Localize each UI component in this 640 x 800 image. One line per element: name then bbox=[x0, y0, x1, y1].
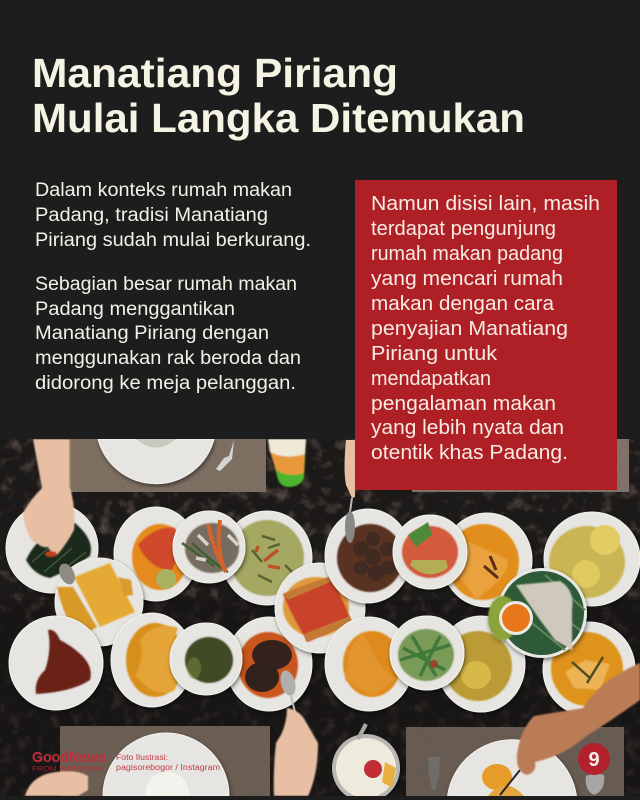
page number badge bbox=[578, 743, 610, 775]
photo credit: pagisorebogor / Instagram bbox=[116, 763, 220, 772]
plate: yellow eggs bbox=[544, 512, 640, 606]
granite table bbox=[0, 439, 640, 796]
hand bottom centre bbox=[274, 708, 318, 796]
drinking glass bbox=[268, 439, 306, 487]
panel: red callout bbox=[355, 180, 617, 490]
text block: first paragraph: Dalam konteks rumah makan bbox=[35, 180, 292, 201]
logo: GoodNews from Indonesia bbox=[32, 749, 106, 773]
plate: bottom left rice bbox=[103, 733, 229, 796]
text block: second paragraph: menggunakan rak beroda dan bbox=[35, 348, 301, 369]
plate: bottom yellow curry bbox=[437, 616, 525, 712]
callout text: yang mencari rumah bbox=[371, 267, 563, 290]
plate: corn fritter bbox=[55, 558, 143, 646]
callout text: penyajian Manatiang bbox=[371, 317, 568, 340]
text block: second paragraph: Manatiang Piriang dengan bbox=[35, 323, 269, 344]
plate: orange curry fish bbox=[442, 513, 532, 607]
plate: chicken bbox=[9, 616, 103, 710]
callout text: yang lebih nyata dan bbox=[371, 416, 564, 439]
bowl: cassava leaves bbox=[170, 623, 242, 695]
hand behind red box bbox=[344, 440, 355, 498]
logo: GoodNews from Indonesia: FROM INDONESIA bbox=[32, 764, 105, 773]
bowl: sambal vegetables bbox=[393, 515, 467, 589]
bowl: dessert bbox=[332, 724, 400, 796]
placemat top left bbox=[70, 439, 266, 492]
plate: dark meat bbox=[226, 617, 312, 711]
plate: bottom right orange curry bbox=[543, 622, 635, 716]
arm and hand bottom right bbox=[517, 663, 640, 775]
top rice plate bbox=[98, 439, 214, 484]
callout text: mendapatkan bbox=[371, 367, 491, 390]
text block: first paragraph bbox=[35, 180, 311, 251]
text block: second paragraph: Sebagian besar rumah makan bbox=[35, 274, 297, 295]
placemat bottom left bbox=[60, 726, 270, 796]
callout text: Piriang untuk bbox=[371, 342, 498, 365]
plate: red balado centre bbox=[275, 563, 365, 653]
callout text: otentik khas Padang. bbox=[371, 441, 568, 464]
fork top bbox=[216, 440, 234, 471]
callout text bbox=[371, 192, 600, 464]
callout text: pengalaman makan bbox=[371, 392, 556, 415]
callout text: Namun disisi lain, masih bbox=[371, 192, 600, 215]
text block: second paragraph bbox=[35, 274, 301, 394]
photo credit: Foto Ilustrasi: bbox=[116, 753, 168, 762]
logo: GoodNews from Indonesia: GoodNews bbox=[32, 749, 106, 766]
bowl: green beans salad bbox=[390, 616, 464, 690]
bowl: anchovy and beans bbox=[173, 511, 245, 583]
text block: first paragraph: Piriang sudah mulai berkurang. bbox=[35, 230, 311, 251]
spoon bbox=[586, 774, 604, 795]
serving spoons bbox=[56, 498, 355, 712]
placemat bottom right bbox=[406, 727, 624, 796]
plate: bottom right egg bbox=[448, 740, 576, 796]
fork bottom bbox=[428, 757, 440, 790]
plate: rendang bbox=[325, 509, 411, 603]
callout text: makan dengan cara bbox=[371, 292, 555, 315]
title: Manatiang Piriang bbox=[32, 50, 398, 96]
placemat top right bbox=[412, 439, 629, 492]
page number badge: 9 bbox=[588, 749, 600, 771]
callout text: rumah makan padang bbox=[371, 242, 563, 265]
title bbox=[32, 50, 525, 141]
food photograph bbox=[0, 439, 640, 796]
plate: bottom orange curry bbox=[325, 617, 413, 711]
text block: second paragraph: didorong ke meja pelanggan. bbox=[35, 373, 296, 394]
plate: orange curry chicken bbox=[111, 613, 193, 707]
title: Mulai Langka Ditemukan bbox=[32, 95, 525, 141]
photo credit bbox=[116, 753, 220, 772]
plate: chicken on banana leaf bbox=[488, 568, 587, 658]
hand top left bbox=[23, 439, 74, 557]
hand bottom left bbox=[25, 771, 88, 796]
text block: first paragraph: Padang, tradisi Manatiang bbox=[35, 205, 268, 226]
plate: green curry bbox=[222, 511, 312, 605]
callout text: terdapat pengunjung bbox=[371, 217, 556, 240]
text block: second paragraph: Padang menggantikan bbox=[35, 299, 235, 320]
plate: tomato sambal bbox=[114, 507, 198, 601]
plate: greens bbox=[6, 503, 98, 593]
